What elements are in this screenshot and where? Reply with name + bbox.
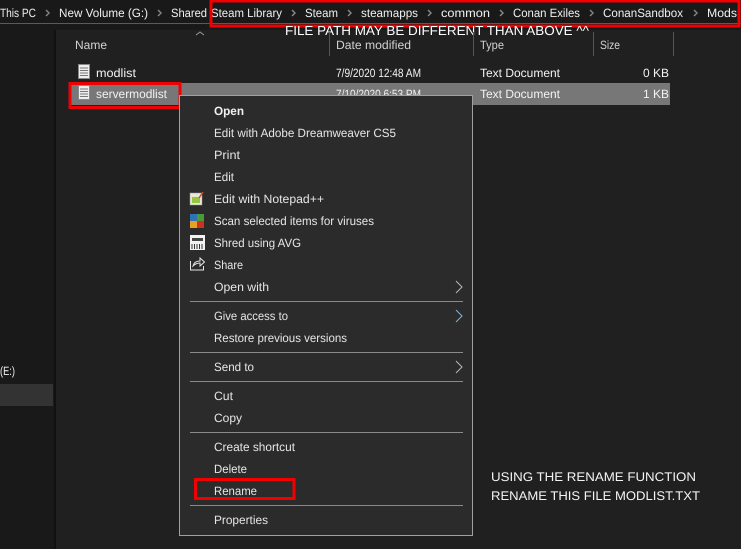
panel: context menu: Edit with Adobe Dreamweaver CS5 [214, 126, 396, 140]
highlight: file path red box [211, 1, 739, 26]
icon: Notepad++ [190, 192, 203, 205]
panel: context menu: Restore previous versions [214, 331, 347, 345]
panel: context menu: Create shortcut [214, 440, 296, 454]
panel: breadcrumb address bar: This PC [0, 6, 36, 20]
column headers: Type [480, 38, 504, 52]
arrow: open with submenu [456, 281, 462, 293]
note: rename instructions [491, 470, 700, 503]
highlight: servermodlist red box [70, 84, 180, 108]
file row: servermodlist selected [71, 83, 670, 105]
panel: breadcrumb address bar: common [441, 6, 490, 20]
file row: modlist [78, 64, 669, 80]
file row: modlist: 0 KB [643, 66, 669, 80]
panel: context menu: Open with [214, 280, 269, 294]
panel: context menu: Cut [214, 389, 234, 403]
panel: breadcrumb address bar: Mods [707, 6, 737, 20]
panel: breadcrumb address bar: steamapps [361, 6, 418, 20]
highlight: rename red box [196, 480, 294, 498]
panel: context menu: Edit with Notepad++ [214, 192, 324, 206]
panel: context menu: Rename [214, 484, 257, 498]
panel: context menu: Give access to [214, 309, 288, 323]
file row: servermodlist selected: servermodlist [96, 87, 168, 101]
file row: servermodlist selected: 7/10/2020 6:53 PM [336, 87, 421, 101]
note: rename instructions: USING THE RENAME FUNCTION [491, 470, 696, 484]
panel: context menu: Delete [214, 462, 247, 476]
panel: context menu [180, 96, 472, 536]
file row: modlist: Text Document [480, 66, 561, 80]
panel: context menu: Properties [214, 513, 268, 527]
note: file path warning: FILE PATH MAY BE DIFFERENT THAN ABOVE ^^ [285, 23, 590, 38]
panel: context menu: Copy [214, 411, 242, 425]
panel: breadcrumb address bar: Shared [171, 6, 207, 20]
panel: context menu: Scan selected items for viruses [214, 214, 374, 228]
panel: breadcrumb address bar: Conan Exiles [513, 6, 580, 20]
panel: breadcrumb address bar: New Volume (G:) [59, 6, 148, 20]
column headers: Date modified [336, 38, 411, 52]
panel: breadcrumb address bar: Steam [305, 6, 338, 20]
panel: context menu: Shred using AVG [214, 236, 301, 250]
file row: modlist: modlist [96, 66, 137, 80]
panel: context menu: Share [214, 258, 243, 272]
arrow: give access submenu [456, 310, 462, 322]
panel: context menu: Print [214, 148, 241, 162]
file row: modlist: 7/9/2020 12:48 AM [336, 66, 421, 80]
column headers [75, 32, 674, 56]
panel: context menu: Send to [214, 360, 254, 374]
panel: breadcrumb address bar: ConanSandbox [603, 6, 683, 20]
icon: AVG scan [190, 214, 204, 228]
file row: servermodlist selected: 1 KB [643, 87, 669, 101]
panel: context menu: Open [214, 104, 244, 118]
icon: AVG shred [190, 235, 205, 250]
panel: breadcrumb address bar [0, 0, 741, 24]
column headers: Name [75, 38, 107, 52]
panel: context menu: Edit [214, 170, 235, 184]
arrow: send to submenu [456, 361, 462, 373]
panel: navigation sidebar [0, 0, 56, 549]
note: rename instructions: RENAME THIS FILE MODLIST.TXT [491, 489, 700, 503]
icon: text file selected [78, 86, 90, 100]
icon: text file [78, 64, 90, 78]
file row: servermodlist selected: Text Document [480, 87, 561, 101]
panel: navigation sidebar: (E:) [0, 364, 15, 378]
icon: share [190, 258, 204, 270]
column headers: Size [600, 38, 620, 52]
panel: breadcrumb address bar: Steam Library [211, 6, 282, 20]
